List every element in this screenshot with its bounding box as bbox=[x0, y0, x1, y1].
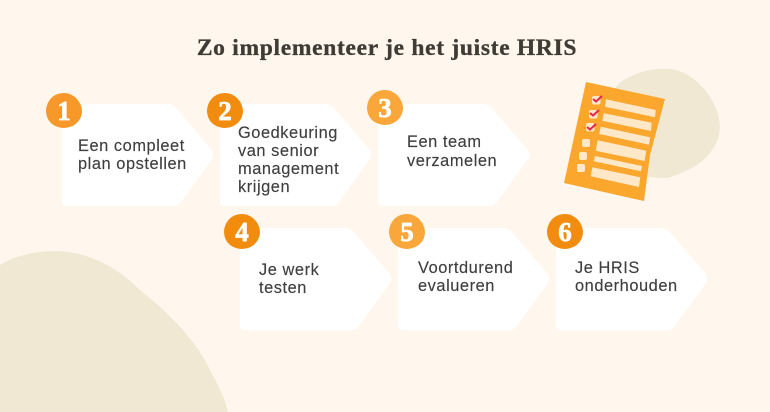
arrow panel 3 bbox=[378, 104, 529, 206]
text 6: Je HRIS bbox=[575, 259, 640, 277]
text 1: Een compleet bbox=[78, 137, 185, 155]
text 5: Voortdurend bbox=[418, 259, 513, 277]
arrow panel 6 bbox=[556, 228, 707, 330]
text 2: management bbox=[238, 160, 339, 178]
step 5 bbox=[389, 214, 549, 330]
badge 4 bbox=[224, 214, 260, 249]
badge 5: 5 bbox=[400, 217, 414, 247]
step 1 bbox=[46, 93, 213, 206]
step 3 bbox=[367, 90, 529, 206]
step 6 bbox=[547, 214, 707, 330]
text 2: van senior bbox=[238, 142, 319, 160]
icon: checklist document bbox=[564, 82, 665, 201]
badge 2 bbox=[207, 93, 243, 128]
arrow panel 4 bbox=[240, 228, 391, 330]
badge 6: 6 bbox=[558, 217, 572, 247]
text 2: Goedkeuring bbox=[238, 124, 338, 142]
text 4: Je werk bbox=[259, 261, 320, 279]
text 1: plan opstellen bbox=[78, 155, 187, 173]
badge 1: 1 bbox=[57, 96, 71, 126]
text 3: Een team bbox=[407, 133, 482, 151]
arrow panel 5 bbox=[398, 228, 549, 330]
badge 6 bbox=[547, 214, 583, 249]
text 2: krijgen bbox=[238, 178, 290, 196]
badge 1 bbox=[46, 93, 82, 128]
badge 5 bbox=[389, 214, 425, 249]
text 4: testen bbox=[259, 279, 307, 297]
title: Zo implementeer je het juiste HRIS bbox=[197, 35, 577, 61]
text 6: onderhouden bbox=[575, 277, 678, 295]
text 5: evalueren bbox=[418, 277, 495, 295]
step 2 bbox=[207, 93, 371, 206]
text 3: verzamelen bbox=[407, 152, 497, 170]
arrow panel 2 bbox=[220, 104, 371, 206]
step 4 bbox=[224, 214, 391, 330]
badge 2: 2 bbox=[218, 96, 232, 126]
arrow panel 1 bbox=[62, 104, 213, 206]
blob: bottom left background bbox=[0, 251, 228, 412]
blob: top right background bbox=[600, 69, 720, 178]
badge 4: 4 bbox=[235, 217, 249, 247]
badge 3: 3 bbox=[378, 93, 392, 123]
badge 3 bbox=[367, 90, 403, 125]
